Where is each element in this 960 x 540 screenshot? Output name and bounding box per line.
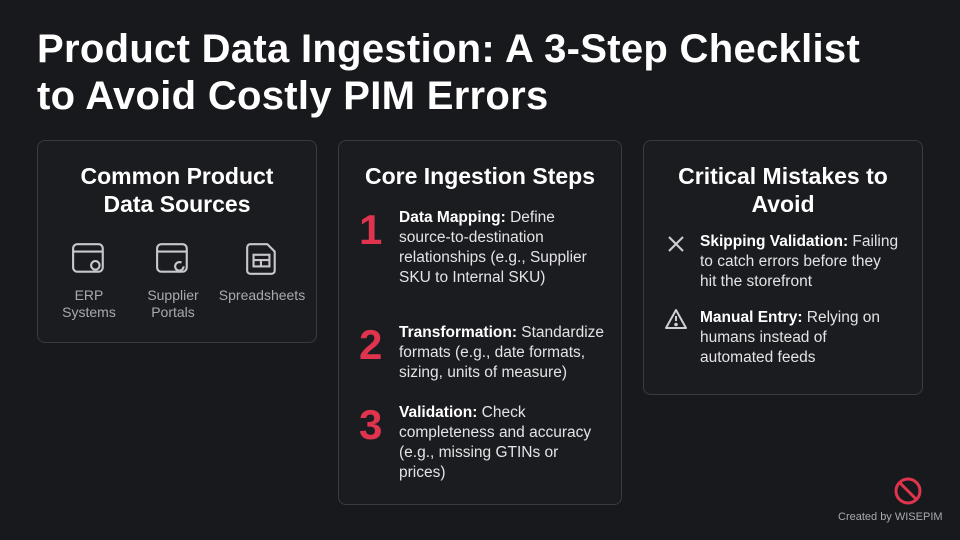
panel: mistakes xyxy=(643,140,923,395)
icon: prohibited xyxy=(894,478,922,504)
credit: Created by WISEPIM xyxy=(838,511,943,523)
title xyxy=(37,27,860,118)
title: to Avoid Costly PIM Errors xyxy=(37,74,549,118)
step 3: Validation: Check xyxy=(399,404,526,421)
step 1: SKU to Internal SKU) xyxy=(399,269,545,286)
icon: supplier xyxy=(156,243,188,273)
heading: sources: Common Product xyxy=(81,163,273,189)
step 3: (e.g., missing GTINs or xyxy=(399,444,558,461)
mistake 2 xyxy=(665,309,880,366)
step 2: Transformation: Standardize xyxy=(399,324,604,341)
step 3: prices) xyxy=(399,464,446,481)
step 2: formats (e.g., date formats, xyxy=(399,344,585,361)
mistake 1: to catch errors before they xyxy=(700,253,881,270)
label: spreadsheets: Spreadsheets xyxy=(219,287,305,303)
label: supplier: Supplier xyxy=(147,287,199,303)
step 2 xyxy=(359,321,604,381)
heading: steps: Core Ingestion Steps xyxy=(365,163,595,189)
step 2: sizing, units of measure) xyxy=(399,364,567,381)
step 1: 1 xyxy=(359,206,382,253)
label: supplier: Portals xyxy=(151,304,195,320)
mistake 1: hit the storefront xyxy=(700,273,812,290)
panel: core steps xyxy=(338,140,622,505)
mistake 1 xyxy=(668,233,898,290)
label: ERP: Systems xyxy=(62,304,116,320)
heading: sources xyxy=(81,163,274,217)
step 2: 2 xyxy=(359,321,382,368)
label: ERP xyxy=(62,287,116,320)
mistake 2: automated feeds xyxy=(700,349,815,366)
heading: mistakes xyxy=(678,163,888,217)
step 3: completeness and accuracy xyxy=(399,424,591,441)
step 1 xyxy=(359,206,587,286)
icon: ERP xyxy=(72,243,104,273)
panel: data sources xyxy=(37,140,317,343)
step 3: 3 xyxy=(359,401,382,448)
heading: sources: Data Sources xyxy=(103,191,250,217)
mistake 2: Manual Entry: Relying on xyxy=(700,309,880,326)
heading: mistakes: Critical Mistakes to xyxy=(678,163,888,189)
step 1: Data Mapping: Define xyxy=(399,209,555,226)
label: supplier xyxy=(147,287,199,320)
step 1: source-to-destination xyxy=(399,229,544,246)
step 3 xyxy=(359,401,592,481)
heading: mistakes: Avoid xyxy=(751,191,815,217)
step 1: relationships (e.g., Supplier xyxy=(399,249,587,266)
icon: spreadsheet xyxy=(246,243,276,275)
mistake 1: Skipping Validation: Failing xyxy=(700,233,898,250)
title: Product Data Ingestion: A 3-Step Checklist xyxy=(37,27,860,71)
label: ERP: ERP xyxy=(75,287,103,303)
mistake 2: humans instead of xyxy=(700,329,827,346)
